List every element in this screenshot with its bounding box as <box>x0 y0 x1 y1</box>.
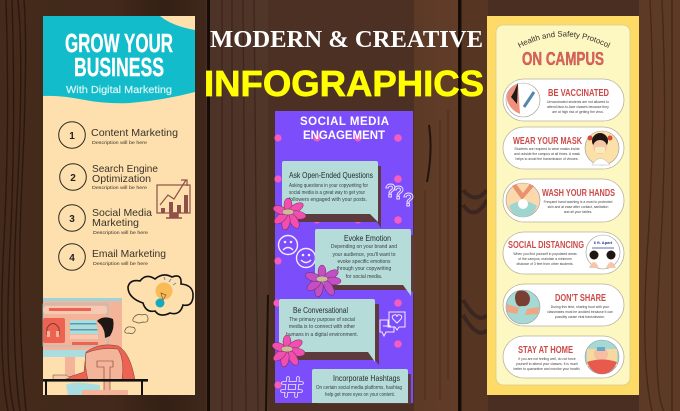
item 4: Email Marketing <box>92 248 166 260</box>
illustration: person at computer <box>43 298 148 395</box>
icon: chat bubbles <box>380 312 405 336</box>
card: don't share <box>503 284 624 326</box>
card: be conversational: Be Conversational <box>293 305 348 315</box>
icon: vaccine <box>506 83 540 117</box>
card: wash your hands: skin and at ease after contact, sanitation <box>548 205 608 209</box>
icon: sad face <box>278 236 298 254</box>
chair back <box>85 348 123 380</box>
item 3 <box>59 205 152 235</box>
card: incorporate hashtags: On certain social media platforms, hashtag <box>316 385 402 391</box>
heading: infographics: INFOGRAPHICS <box>204 63 484 104</box>
icon: happy face <box>296 248 316 268</box>
card: ask open-ended questions: social media is a great way to get your <box>289 190 365 196</box>
card: be conversational: The primary purpose of social <box>289 317 355 323</box>
card: wear your mask: WEAR YOUR MASK <box>513 136 583 147</box>
card: stay at home: better to quarantine and monitor your health. <box>514 367 581 371</box>
icon: question marks <box>385 181 414 210</box>
card: incorporate hashtags: help get more eyes on your content. <box>325 392 395 398</box>
item 2: Description will be here <box>92 185 148 190</box>
card: evoke emotion: evoke specific emotions <box>337 259 391 265</box>
item 1: Content Marketing <box>91 127 178 139</box>
card: wear your mask <box>503 127 624 169</box>
title: on campus: ON CAMPUS <box>522 49 604 69</box>
item 1: Description will be here <box>92 140 148 145</box>
title: grow your: GROW YOUR <box>65 28 173 58</box>
subtitle: With Digital Marketing <box>66 85 172 96</box>
card: be vaccinated: attend face-to-face classes because they <box>547 105 609 109</box>
card: evoke emotion: Evoke Emotion <box>344 233 391 243</box>
item 1: 1 <box>69 131 75 142</box>
icon: thought cloud with light bulb <box>125 275 193 334</box>
card: don't share: During this time, sharing food with your <box>551 305 610 309</box>
card: ask open-ended questions: followers engaged with your posts. <box>289 197 367 203</box>
item 1 <box>59 122 178 148</box>
item 3: Marketing <box>92 217 139 229</box>
panel: social media engagement <box>271 111 414 404</box>
icon: pink flower <box>271 335 306 368</box>
curved subtitle: Health and Safety Protocol <box>518 31 610 48</box>
icon: question marks: ? <box>385 181 396 201</box>
icon: flower <box>272 198 307 231</box>
icon: question marks: ? <box>393 183 404 203</box>
card: stay at home: yourself to attend your classes. It is much <box>516 362 578 366</box>
item 2: Search Engine <box>92 163 158 175</box>
card: be vaccinated: BE VACCINATED <box>548 88 609 99</box>
card: be conversational: humans in a digital environment. <box>286 332 358 338</box>
item 3: 3 <box>69 214 75 225</box>
card: be conversational: media is to connect with other <box>289 324 355 330</box>
card: be conversational <box>279 299 379 365</box>
card: incorporate hashtags: Incorporate Hashtags <box>333 373 400 383</box>
card: be vaccinated <box>503 79 624 121</box>
card: wear your mask: helps to avoid the transmission of viruses. <box>516 157 579 161</box>
item 3: Social Media <box>92 207 152 219</box>
icon: growth chart on monitor <box>157 180 190 218</box>
card: ask open-ended questions: Ask Open-Ended Questions <box>289 170 373 180</box>
card: ask open-ended questions <box>282 161 381 228</box>
card: incorporate hashtags <box>312 369 411 404</box>
card: evoke emotion: through your copywriting <box>337 266 391 272</box>
card: social distancing <box>503 232 624 274</box>
card: stay at home: If you are not feeling well, do not force <box>518 357 576 361</box>
card: evoke emotion: your audience, you'll want to <box>333 252 396 258</box>
title: business: BUSINESS <box>74 52 164 82</box>
panel: grow your business <box>43 16 195 395</box>
icon: washing hands <box>506 183 540 217</box>
card: don't share: possibly cause viral transmission. <box>555 315 605 319</box>
card: be vaccinated: are at high risk of getting the virus. <box>552 110 604 114</box>
card: don't share: DON'T SHARE <box>555 293 606 304</box>
card: evoke emotion: for social media. <box>346 274 382 280</box>
card: wear your mask: Students are required to wear masks inside <box>514 147 580 151</box>
card: wear your mask: and outside the campus at all times. A mask <box>514 152 580 156</box>
item 4: 4 <box>69 253 75 264</box>
shirt <box>66 345 135 380</box>
item 2: Optimization <box>92 173 151 185</box>
card: wash your hands: and all your tables. <box>564 210 592 214</box>
card: wash your hands: WASH YOUR HANDS <box>542 188 615 199</box>
item 2 <box>60 163 158 190</box>
card: stay at home: STAY AT HOME <box>518 345 573 356</box>
icon: sharing food <box>506 290 540 324</box>
polka dots <box>273 134 402 389</box>
card: don't share: classmates must be avoided because it can <box>547 310 613 314</box>
card: evoke emotion <box>315 229 414 296</box>
card: social distancing: of the campus, maintain a minimum <box>518 257 572 261</box>
panel: health and safety protocol <box>487 16 639 395</box>
icon: purple flower <box>304 265 341 298</box>
item 4: Description will be here <box>93 261 149 266</box>
teal header blob <box>43 16 195 103</box>
item 4 <box>59 244 166 270</box>
icon: girl with mask <box>585 131 619 165</box>
card: stay at home <box>503 336 624 378</box>
title: engagement: ENGAGEMENT <box>303 130 385 142</box>
card: ask open-ended questions: Asking questions in your copywriting for <box>289 183 368 189</box>
card: be vaccinated: Unvaccinated students are not allowed to <box>547 100 609 104</box>
item 3: Description will be here <box>93 230 149 235</box>
heading: modern and creative: MODERN & CREATIVE <box>210 27 483 53</box>
icon: question marks: ? <box>403 190 414 210</box>
card: social distancing: SOCIAL DISTANCING <box>508 240 584 251</box>
card: evoke emotion: Depending on your brand and <box>331 244 397 250</box>
title: social media: SOCIAL MEDIA <box>300 116 389 128</box>
item 2: 2 <box>70 173 76 184</box>
card: social distancing: distance of 3 feet from other students. <box>517 262 574 266</box>
icon: hashtag <box>282 378 302 396</box>
card: wash your hands: Frequent hand washing is a must to protected <box>544 200 613 204</box>
card: social distancing: When you find yourself in populated areas <box>513 252 577 256</box>
icon: two students apart: 6 ft. Apart <box>594 240 613 245</box>
card: wash your hands <box>503 179 624 222</box>
icon: sick in bed <box>585 340 619 374</box>
